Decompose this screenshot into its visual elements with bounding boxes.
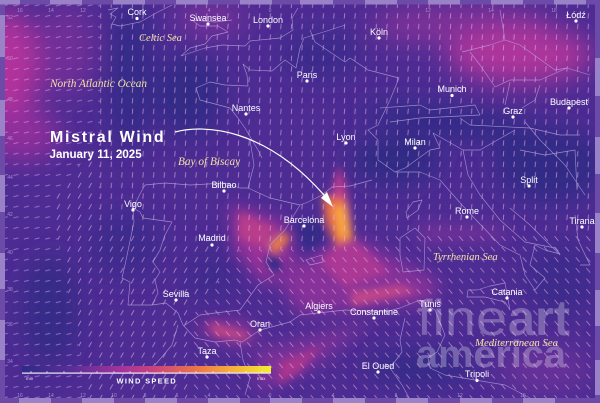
- graticule labels: 48: [7, 97, 13, 103]
- city dots and labels: Łódź: [566, 10, 586, 20]
- graticule labels: 14: [48, 8, 54, 14]
- city dots and labels: Tirana: [569, 216, 595, 226]
- city dots and labels: Madrid: [198, 233, 226, 243]
- coastlines and borders: [108, 5, 590, 403]
- sea labels: North Atlantic Ocean: [49, 78, 147, 90]
- city dots and labels: Graz: [503, 106, 523, 116]
- watermark: fine: [417, 290, 507, 346]
- graticule labels: 52: [7, 15, 13, 21]
- graticule labels: 14: [48, 393, 54, 399]
- graticule labels: 12: [457, 393, 463, 399]
- city dots and labels: Catania: [491, 287, 523, 297]
- graticule labels: 4: [332, 393, 335, 399]
- city dots and labels: Tripoli: [465, 369, 489, 379]
- legend: wind speed: WIND SPEED: [116, 376, 177, 386]
- city dots and labels: El Oued: [362, 361, 394, 371]
- city dots and labels: Taza: [197, 346, 217, 356]
- graticule labels: 16: [17, 8, 23, 14]
- watermark: art: [508, 290, 570, 346]
- graticule labels: 36: [7, 322, 13, 328]
- city dots and labels: Lyon: [336, 132, 356, 142]
- graticule labels: 14: [488, 8, 494, 14]
- graticule labels: 12: [80, 8, 86, 14]
- graticule labels: 50: [7, 56, 13, 62]
- title: January 11, 2025: [50, 148, 142, 161]
- city dots and labels: Nantes: [232, 103, 261, 113]
- arrow: mistral path: [175, 129, 333, 207]
- city dots and labels: Budapest: [550, 97, 589, 107]
- city dots and labels: Algiers: [305, 301, 333, 311]
- graticule labels: 10: [111, 393, 117, 399]
- city dots and labels: Split: [520, 175, 538, 185]
- sea labels: Mediterranean Sea: [474, 337, 558, 349]
- graticule labels: 0: [269, 8, 272, 14]
- graticule labels: 6: [176, 393, 179, 399]
- graticule labels: 18: [551, 8, 557, 14]
- graticule labels: 12: [80, 393, 86, 399]
- graticule labels: 44: [7, 175, 13, 181]
- graticule labels: 12: [425, 8, 431, 14]
- city dots and labels: [124, 7, 595, 382]
- city dots and labels: Sevilla: [163, 289, 189, 299]
- legend: wind speed: min: [26, 376, 34, 381]
- graticule labels: 38: [7, 287, 13, 293]
- city dots and labels: Tunis: [419, 299, 441, 309]
- city dots and labels: Constantine: [350, 307, 398, 317]
- city dots and labels: Bilbao: [211, 180, 237, 190]
- city dots and labels: Rome: [455, 206, 479, 216]
- legend: wind speed: [22, 366, 271, 386]
- title: [50, 129, 165, 161]
- sea labels: Bay of Biscay: [178, 156, 241, 168]
- legend: wind speed: max: [257, 376, 266, 381]
- city dots and labels: Munich: [437, 84, 467, 94]
- city dots and labels: Vigo: [124, 199, 142, 209]
- watermark: america: [416, 334, 567, 376]
- title: Mistral Wind: [50, 129, 165, 146]
- city dots and labels: Barcelona: [284, 215, 324, 225]
- watermark: [416, 290, 570, 376]
- graticule labels: 16: [520, 393, 526, 399]
- graticule labels: 34: [7, 359, 13, 365]
- graticule labels: 8: [395, 393, 398, 399]
- city dots and labels: Milan: [404, 137, 426, 147]
- graticule labels: 40: [7, 250, 13, 256]
- sea labels: [49, 33, 558, 349]
- graticule labels: 8: [144, 393, 147, 399]
- sea labels: Celtic Sea: [139, 33, 182, 44]
- city dots and labels: Köln: [370, 27, 388, 37]
- graticule labels: 0: [269, 393, 272, 399]
- graticule labels: 42: [7, 212, 13, 218]
- city dots and labels: Cork: [127, 7, 147, 17]
- graticule labels: 46: [7, 136, 13, 142]
- city dots and labels: Oran: [250, 319, 270, 329]
- city dots and labels: Paris: [297, 70, 318, 80]
- city dots and labels: Swansea: [189, 13, 227, 23]
- city dots and labels: London: [253, 15, 283, 25]
- graticule labels: 4: [208, 8, 211, 14]
- sea labels: Tyrrhenian Sea: [433, 252, 498, 263]
- graticule labels: 16: [17, 393, 23, 399]
- graticule labels: 4: [208, 393, 211, 399]
